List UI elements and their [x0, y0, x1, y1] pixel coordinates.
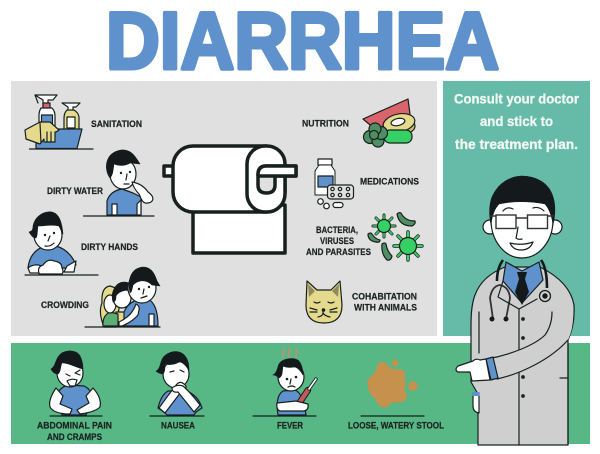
coat: [471, 267, 574, 445]
advice text: [454, 92, 580, 152]
shelf line: [30, 148, 93, 150]
label: MEDICATIONS: [360, 176, 420, 188]
cohabitation: [306, 281, 418, 323]
label: [352, 292, 418, 314]
label: NAUSEA: [161, 420, 195, 432]
figure: man with cramps: [50, 351, 100, 415]
figure: woman: [100, 286, 126, 327]
hair: [490, 176, 555, 225]
coat buttons: [521, 317, 525, 398]
arm: [487, 310, 573, 379]
bacteria: [306, 213, 422, 260]
label: BACTERIA,: [316, 225, 358, 236]
pointing hand: [456, 359, 490, 381]
advice text: the treatment plan.: [455, 137, 578, 152]
cuff: [486, 357, 498, 380]
icon: small virus: [373, 215, 395, 237]
panel: advice: [443, 81, 590, 336]
nutrition: [302, 99, 417, 147]
icon: blister pack: [328, 185, 354, 199]
label: LOOSE, WATERY STOOL: [348, 420, 444, 432]
icon: yellow glove: [25, 122, 59, 144]
icon: pill bottle: [315, 159, 335, 195]
crowding: [41, 267, 160, 327]
ears: [483, 220, 562, 234]
tie: [515, 272, 529, 305]
label: CROWDING: [41, 300, 89, 311]
dirty water: [47, 150, 154, 216]
label: AND PARASITES: [306, 247, 371, 258]
symptom: loose stool: [348, 361, 444, 432]
advice text: and stick to: [480, 114, 553, 129]
icon: cat: [306, 281, 342, 323]
icon: spray bottle small: [62, 103, 80, 130]
label: DIRTY HANDS: [81, 242, 139, 253]
icon: spray bottle large: [35, 95, 57, 132]
shirt collar: [503, 262, 543, 303]
panel: causes: [11, 81, 437, 336]
label: [306, 225, 371, 258]
panel: symptoms: [11, 343, 590, 444]
icon: large virus: [394, 232, 422, 260]
figure: man covering mouth: [156, 352, 202, 415]
icon: broccoli: [364, 123, 388, 147]
glasses: [490, 215, 554, 228]
label: [37, 420, 112, 443]
stethoscope: [490, 260, 547, 319]
icon: toilet paper: [164, 146, 296, 253]
icon: melon slice: [381, 111, 417, 135]
coat details: [479, 281, 568, 445]
label: NUTRITION: [302, 118, 349, 130]
label: ABDOMINAL PAIN: [37, 420, 112, 432]
face: [491, 182, 553, 258]
advice text: Consult your doctor: [454, 92, 580, 106]
symptom: fever: [253, 348, 316, 432]
medications: [315, 159, 420, 209]
icon: cucumber: [384, 130, 412, 143]
figure: man drinking: [106, 150, 153, 215]
label: SANITATION: [91, 119, 142, 130]
stethoscope parts: [490, 290, 550, 322]
icon: stool stain: [368, 361, 417, 406]
mouth: [510, 242, 533, 250]
figure: man with thermometer: [273, 359, 316, 415]
icon: loose pills: [318, 199, 343, 209]
pocket pen: [473, 393, 479, 413]
label: AND CRAMPS: [47, 432, 103, 443]
sanitation: [25, 95, 142, 149]
label: DIRTY WATER: [47, 186, 103, 197]
icon: bacteria beans: [368, 213, 415, 260]
label: VIRUSES: [320, 236, 354, 247]
symptom: nausea: [150, 352, 204, 432]
label: WITH ANIMALS: [354, 302, 418, 314]
label: COHABITATION: [352, 292, 417, 302]
icon: bucket: [36, 129, 82, 148]
symptom: abdominal pain: [37, 351, 112, 443]
figure: man washing hands: [28, 212, 76, 274]
figure: child: [112, 282, 134, 308]
dirty hands: [25, 212, 139, 275]
figure: man: [119, 267, 160, 326]
figure: doctor: [456, 176, 574, 445]
icon: heat lines: [282, 348, 297, 357]
label: FEVER: [277, 420, 303, 432]
icon: watermelon: [363, 99, 410, 130]
